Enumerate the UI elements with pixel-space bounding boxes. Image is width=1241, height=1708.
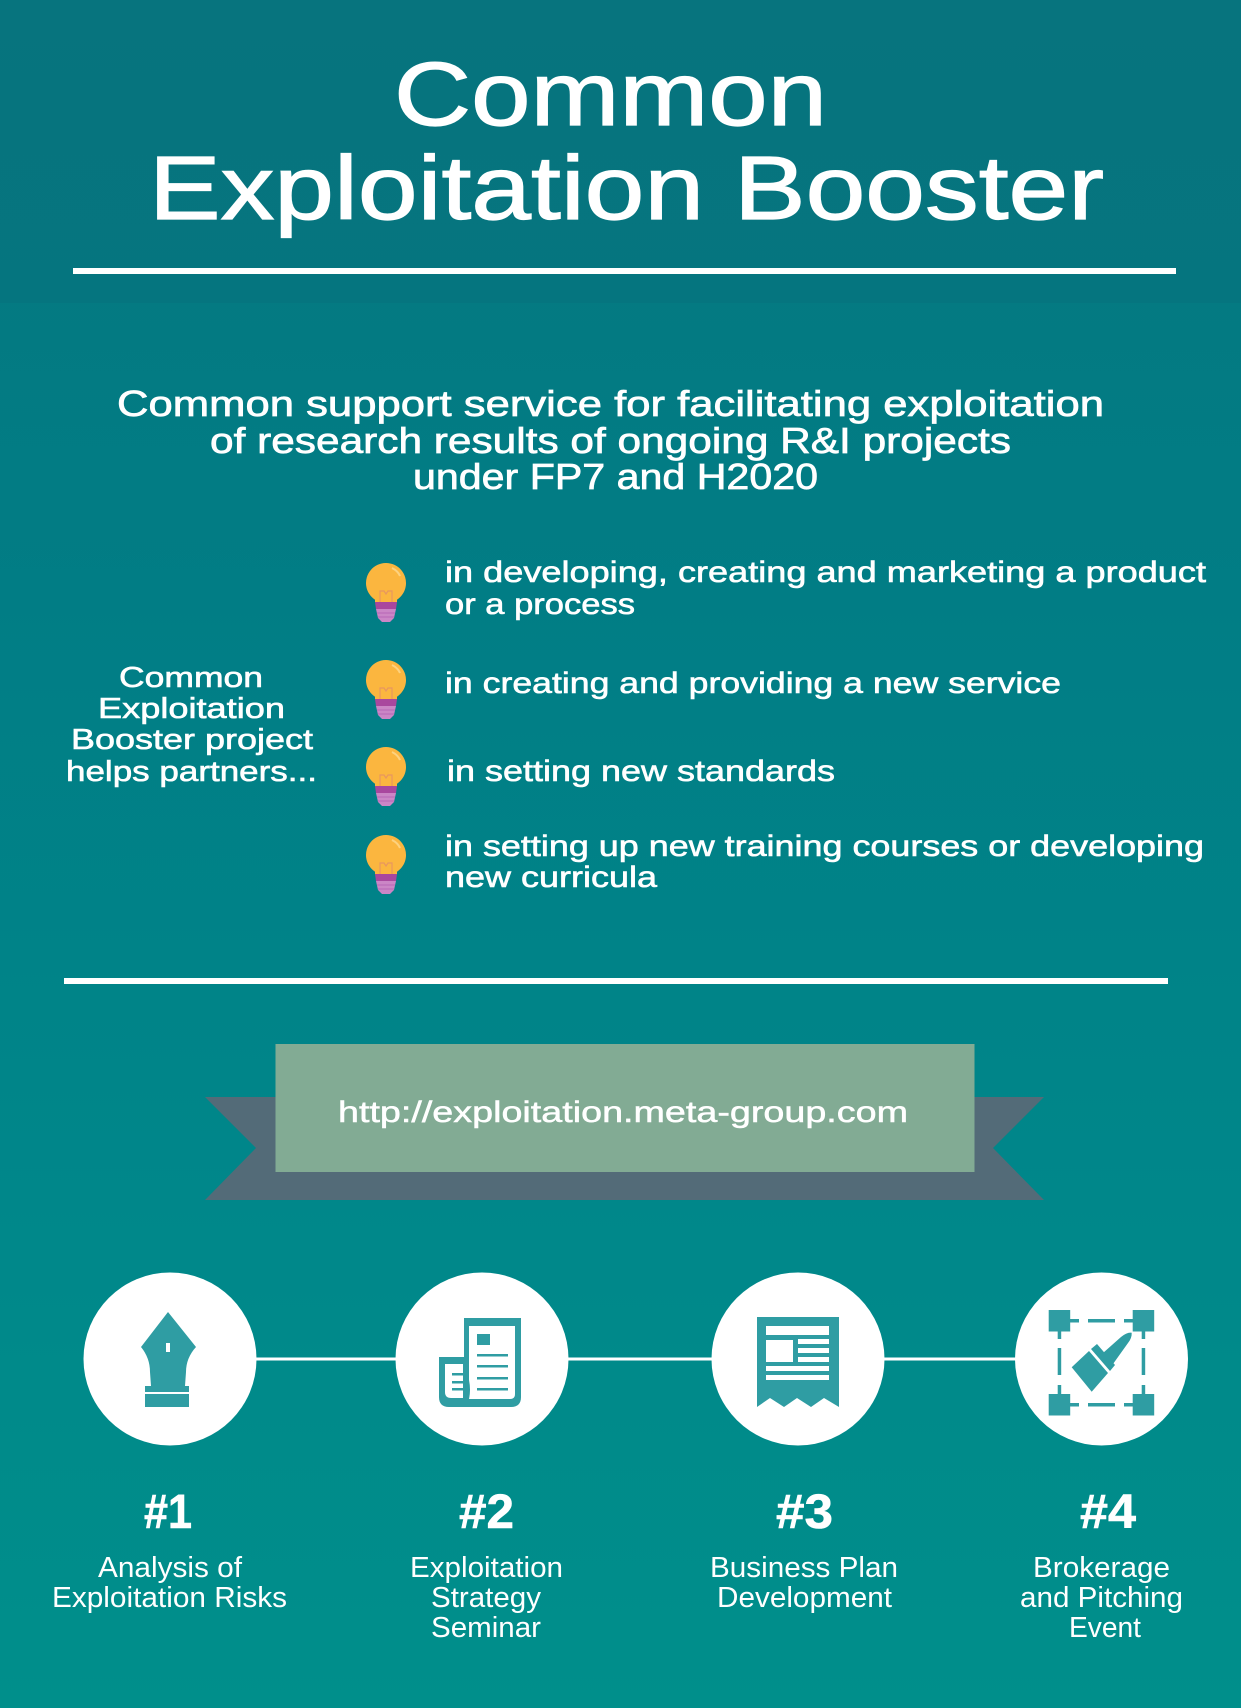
- subtitle: Common support service for facilitating exploitation: [117, 383, 1104, 424]
- step 2: [396, 1272, 568, 1644]
- benefit 4: [445, 830, 1204, 894]
- step label: Event: [1069, 1612, 1141, 1644]
- circle: [396, 1272, 568, 1446]
- intro text: project helps partners: helps partners...: [66, 756, 317, 788]
- step label: and Pitching: [1020, 1582, 1183, 1614]
- step number: #3: [776, 1486, 833, 1539]
- step 1: [52, 1272, 287, 1614]
- benefit 4: new curricula: [445, 861, 657, 894]
- benefit 1: or a process: [445, 588, 635, 621]
- header band: [0, 0, 1241, 303]
- step label: Exploitation: [410, 1552, 563, 1584]
- step number: #2: [459, 1486, 514, 1539]
- step label: Exploitation Risks: [52, 1582, 287, 1614]
- benefit 3: in setting new standards: [447, 755, 835, 788]
- circle: [712, 1272, 884, 1446]
- benefit 1: [445, 556, 1207, 621]
- step label: [710, 1552, 898, 1614]
- icon: receipt document: [757, 1317, 839, 1407]
- subtitle: [117, 383, 1104, 497]
- icon: light bulb 2: [366, 660, 406, 719]
- benefit 1: in developing, creating and marketing a product: [445, 556, 1207, 589]
- benefit 2: in creating and providing a new service: [445, 667, 1061, 700]
- intro text: project helps partners: Exploitation: [98, 693, 285, 725]
- step label: Seminar: [431, 1612, 541, 1644]
- title: Common: [394, 45, 827, 145]
- step number: #4: [1080, 1486, 1136, 1539]
- step 3: [710, 1272, 898, 1614]
- step label: [410, 1552, 563, 1644]
- step label: Strategy: [431, 1582, 542, 1614]
- icon: light bulb 4: [366, 835, 406, 894]
- step 4: [1015, 1272, 1188, 1644]
- intro text: project helps partners: Booster project: [71, 724, 313, 756]
- header rule: [73, 268, 1176, 274]
- subtitle: of research results of ongoing R&I projects: [210, 420, 1011, 461]
- title: Exploitation Booster: [149, 139, 1104, 239]
- banner panel: [276, 1044, 974, 1172]
- icon: light bulb 1: [366, 563, 406, 622]
- intro text: project helps partners: Common: [119, 662, 263, 694]
- circle: [1015, 1272, 1188, 1446]
- subtitle: under FP7 and H2020: [413, 456, 818, 497]
- circle: [84, 1272, 256, 1446]
- connector lines: [170, 1358, 1100, 1360]
- ribbon banner: [205, 1044, 1044, 1200]
- title: [149, 45, 1104, 239]
- icon: pen nib: [141, 1312, 196, 1407]
- website url: http://exploitation.meta-group.com: [338, 1096, 908, 1129]
- list of benefits: [366, 556, 1207, 894]
- icon: paint brush in selection frame: [1049, 1310, 1154, 1416]
- step number: #1: [144, 1486, 192, 1539]
- icon: newspaper: [439, 1318, 521, 1407]
- benefit 4: in setting up new training courses or developing: [445, 830, 1204, 863]
- step label: [52, 1552, 287, 1614]
- ribbon tails: [205, 1097, 1044, 1200]
- step label: Development: [717, 1582, 892, 1614]
- step label: [1020, 1552, 1183, 1644]
- intro text: project helps partners: [66, 662, 317, 788]
- icon: light bulb 3: [366, 747, 406, 806]
- step label: Business Plan: [710, 1552, 898, 1584]
- step label: Brokerage: [1033, 1552, 1170, 1584]
- step label: Analysis of: [98, 1552, 243, 1584]
